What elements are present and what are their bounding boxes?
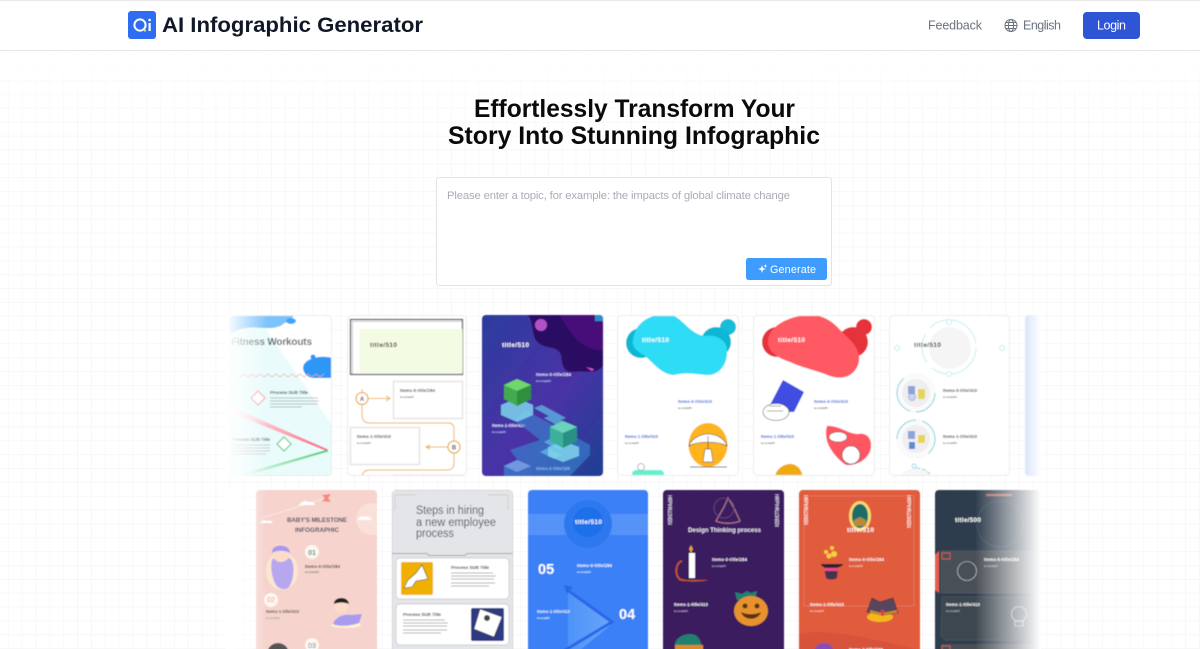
card: steps in hiring: a new employee [416, 517, 496, 529]
card: blue arrow template: 04 [619, 607, 635, 623]
nav link: language: English [1023, 18, 1061, 32]
card: baby milestone: BABY'S MILESTONE [287, 517, 347, 524]
card: circular rings: Items-0-title/410 [943, 388, 978, 393]
card: design thinking: Items-1-title/410 [674, 602, 709, 607]
card: baby milestone: 01 [308, 550, 316, 557]
card: red blob: Items-1-data/284 [761, 441, 775, 445]
nav link: feedback: Feedback [928, 18, 983, 32]
card: orange halloween: Items-0-title/284 [849, 557, 885, 562]
card: red blob: title/510 [778, 337, 805, 344]
card: cyan blob [617, 314, 739, 478]
card: design thinking: Items-0-data/284 [712, 564, 726, 568]
card: partial blue template [1025, 315, 1040, 476]
card: fitness workouts: Fitness Workouts [231, 337, 312, 348]
card: design thinking: Design Thinking process [688, 527, 762, 534]
card: blue arrow template: Items-1-title/410 [537, 609, 571, 614]
card: red blob [753, 315, 875, 478]
card: steps in hiring: Steps in hiring [416, 505, 484, 517]
card: baby milestone: 02 [267, 597, 275, 604]
card: isometric stairs: Items-0-title/284 [536, 372, 572, 377]
card: steps in hiring: Process SUB Title [451, 565, 489, 570]
icon: logo [128, 11, 156, 39]
card: isometric stairs: Items-2-title/199 [536, 466, 571, 471]
card: red blob: Items-0-title/410 [814, 399, 849, 404]
card: flowchart template: Items-0-title/284 [400, 388, 436, 393]
prompt input panel [436, 178, 832, 286]
generate button [746, 258, 827, 280]
login button: Login [1097, 18, 1126, 32]
logo wordmark: AI Infographic Generator [162, 14, 423, 37]
card: isometric stairs: title/510 [502, 342, 529, 349]
card: design thinking: HAPPY HALLOWEEN [773, 494, 779, 527]
card: flowchart template [347, 315, 467, 481]
card: flowchart template: A [360, 397, 365, 403]
card: flowchart template: Items-1-data/284 [357, 441, 371, 445]
card: cyan blob: title/510 [642, 337, 669, 344]
card: orange halloween: Items-0-data/284 [849, 564, 863, 568]
card: dark tech template: Items-1-title/410 [946, 602, 981, 607]
card: orange halloween: Items-1-data/284 [810, 609, 824, 613]
card: circular rings: Items-1-data/284 [943, 441, 957, 445]
card: steps in hiring: Process SUB Title [403, 612, 441, 617]
card: blue arrow template: 05 [538, 562, 554, 578]
card: isometric stairs: Items-1-data/284 [492, 430, 506, 434]
template row 2 [256, 490, 1056, 649]
card: blue arrow template: Items-1-data/284 [537, 616, 550, 620]
card: cyan blob: Items-0-title/410 [678, 399, 713, 404]
template row 1 [230, 314, 1038, 477]
card: isometric stairs: Items-0-data/284 [536, 379, 551, 383]
card: baby milestone: Items-0-data/284 [305, 570, 319, 574]
card: cyan blob: Items-1-data/284 [625, 441, 639, 445]
card: cyan blob: Items-0-data/284 [678, 406, 692, 410]
card: design thinking: Items-1-data/284 [674, 609, 688, 613]
card: flowchart template: title/510 [370, 342, 397, 349]
headline: Story Into Stunning Infographic [448, 122, 820, 150]
card: red blob: Items-0-data/284 [814, 406, 828, 410]
card: orange halloween [799, 490, 920, 649]
card: blue arrow template: title/510 [575, 519, 602, 526]
card: orange halloween: Items-1-title/410 [810, 602, 845, 607]
card: fitness workouts: Process SUB Title [270, 390, 308, 396]
card: blue arrow template: Items-0-title/284 [577, 563, 613, 568]
icon: globe [1005, 20, 1017, 32]
card: orange halloween: title/510 [847, 527, 874, 534]
card: isometric stairs [482, 315, 603, 487]
generate button: Generate [770, 264, 816, 276]
card: dark tech template: title/500 [955, 517, 981, 524]
card: dark tech template: Items-0-title/284 [984, 557, 1020, 562]
card: isometric stairs: Items-1-title/410 [492, 423, 526, 428]
card: cyan blob: Items-1-title/410 [625, 434, 659, 439]
card: dark tech template [934, 489, 1038, 649]
card: baby milestone: Items-0-title/284 [305, 564, 341, 569]
placeholder text: Please enter a topic, for example: the impacts of global climate change [447, 190, 790, 202]
card: dark tech template: Items-0-data/284 [984, 564, 998, 568]
card: fitness workouts [228, 315, 332, 477]
card: baby milestone: Items-1-title/410 [266, 609, 300, 614]
card: design thinking: HAPPY HALLOWEEN [666, 495, 672, 525]
side fade overlays [226, 313, 1041, 649]
headline: Effortlessly Transform Your [474, 95, 795, 123]
white card outlines [228, 316, 1010, 476]
login button [1083, 12, 1140, 39]
card: design thinking [663, 490, 784, 649]
card: circular rings [890, 316, 1008, 475]
card: flowchart template: Items-1-title/410 [357, 434, 392, 439]
card: flowchart template: Items-0-data/284 [400, 395, 414, 399]
card: fitness workouts: Process SUB Title [232, 437, 270, 443]
card: flowchart template: B [452, 446, 457, 452]
card: baby milestone: INFOGRAPHIC [295, 527, 340, 534]
card: blue arrow template [528, 490, 648, 649]
card: circular rings: title/510 [914, 342, 941, 349]
card: orange halloween: HAPPY HALLOWEEN [802, 495, 808, 525]
card: circular rings: Items-1-title/410 [943, 434, 978, 439]
headline [448, 95, 820, 150]
card: blue arrow template: Items-0-data/284 [577, 570, 591, 574]
card: orange halloween: HAPPY HALLOWEEN [905, 495, 911, 528]
card: design thinking: Items-0-title/284 [712, 557, 748, 562]
card: baby milestone [256, 490, 388, 649]
card: dark tech template: Items-1-data/284 [946, 609, 960, 613]
card: steps in hiring [392, 490, 513, 649]
card: steps in hiring: process [416, 528, 454, 540]
card: baby milestone: Items-1-data/284 [266, 616, 280, 620]
card: circular rings: Items-0-data/284 [943, 395, 957, 399]
card: red blob: Items-1-title/410 [761, 434, 795, 439]
navigation bar [0, 0, 1200, 51]
